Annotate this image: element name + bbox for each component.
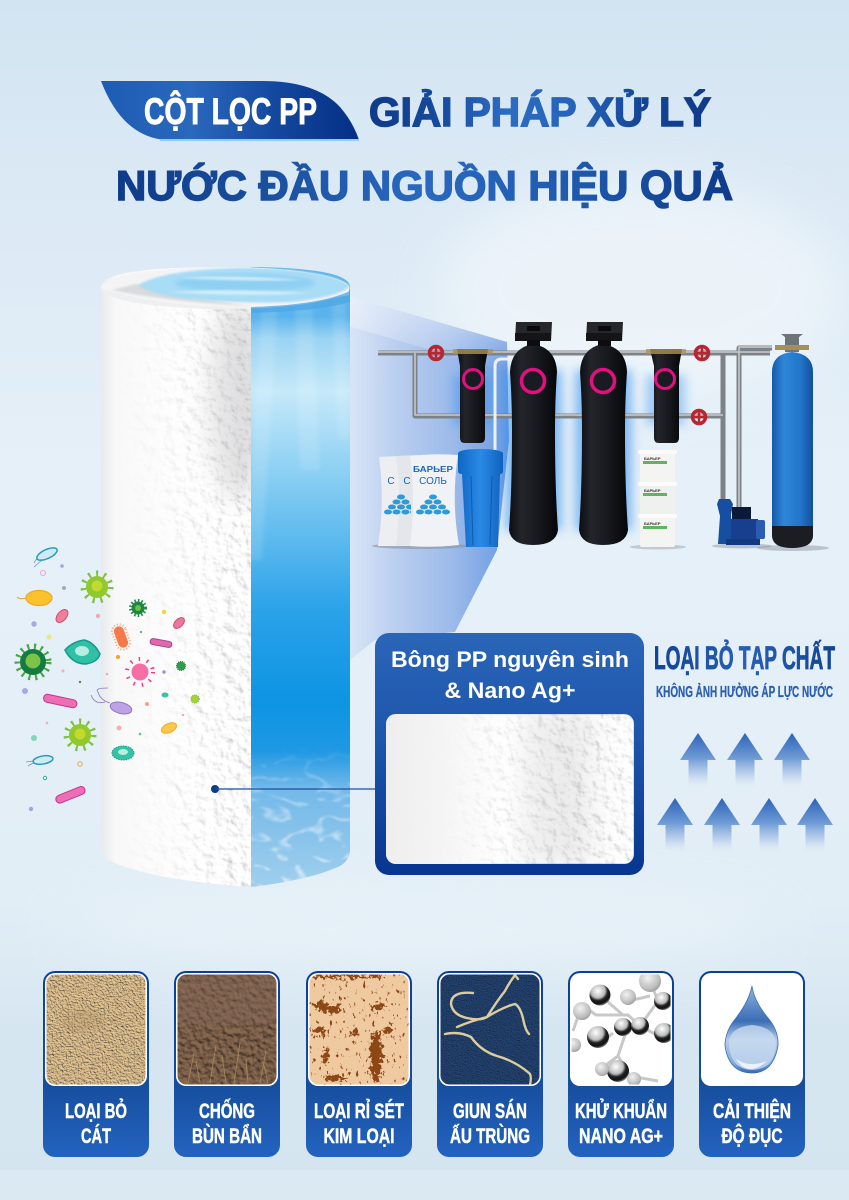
microbe: pink virus xyxy=(127,659,153,685)
small filter 1 xyxy=(453,349,493,443)
label: NANO AG+ xyxy=(579,1125,663,1148)
label: KIM LOẠI xyxy=(324,1125,394,1148)
microbes xyxy=(17,545,199,811)
label xyxy=(65,1099,127,1148)
small floating dots xyxy=(22,564,184,811)
valves xyxy=(429,346,709,424)
upward water-pressure arrows xyxy=(657,733,833,854)
title banner: cột lọc PP: CỘT LỌC PP xyxy=(144,90,317,132)
blue filter tank xyxy=(757,334,829,551)
card: sand xyxy=(43,971,149,1157)
microbe: blue protozoa lower xyxy=(26,754,54,766)
label: KHỬ KHUẨN xyxy=(575,1099,667,1123)
water surface xyxy=(138,268,350,303)
microbe: magenta small rod xyxy=(150,638,172,648)
heading: remove impurities xyxy=(654,640,835,701)
microbe: green virus xyxy=(84,574,110,600)
label: CHỐNG xyxy=(199,1099,255,1123)
foam close-up swatch xyxy=(386,714,634,864)
salt bags xyxy=(372,454,468,549)
microbe: purple flagellate xyxy=(91,688,133,716)
chemical buckets xyxy=(630,450,686,550)
microbe: dark green small xyxy=(130,600,146,616)
salt bags: С xyxy=(403,476,411,487)
panel heading xyxy=(391,647,629,703)
card: mud xyxy=(174,971,280,1157)
label xyxy=(713,1099,791,1148)
label xyxy=(192,1099,262,1148)
microbe: dark green tiny xyxy=(176,662,186,670)
card: worms xyxy=(437,971,543,1157)
microbe: teal amoeba lower xyxy=(112,746,134,760)
panel: PP cotton and Nano Ag+ xyxy=(375,633,644,875)
microbe: green virus lower xyxy=(67,722,93,748)
salt bags: СОЛЬ xyxy=(419,476,447,487)
feature cards xyxy=(43,970,805,1157)
label xyxy=(314,1100,404,1148)
PP filter cylinder xyxy=(100,267,376,890)
panel heading: Bông PP nguyên sinh xyxy=(391,647,629,672)
chemical buckets: БАРЬЕР xyxy=(644,456,661,461)
black tank 1 xyxy=(509,322,558,545)
label: BÙN BẨN xyxy=(192,1124,262,1148)
image: mud texture xyxy=(177,974,277,1085)
image: rust texture xyxy=(306,974,409,1085)
image: silver molecules xyxy=(572,974,670,1084)
blue salt tank xyxy=(458,449,503,547)
pump xyxy=(712,499,772,548)
chemical buckets: БАРЬЕР xyxy=(644,521,661,526)
title banner: cột lọc PP xyxy=(101,81,359,141)
card: nano silver xyxy=(567,970,674,1157)
microbe: dark green spiked xyxy=(18,647,48,677)
pipes xyxy=(378,347,772,510)
tank glow xyxy=(453,370,685,530)
microbe: magenta rod xyxy=(43,694,78,708)
white foam half xyxy=(101,267,266,887)
small filter 2 xyxy=(646,349,686,443)
microbe: teal tiny xyxy=(162,692,168,698)
microbe: orange tiny xyxy=(160,721,178,735)
image: sand texture xyxy=(46,974,146,1085)
microbe: lime tiny xyxy=(191,695,199,703)
black tank 2 xyxy=(579,322,628,545)
title line 2: NƯỚC ĐẦU NGUỒN HIỆU QUẢ xyxy=(116,161,733,209)
label: CẢI THIỆN xyxy=(713,1099,791,1123)
salt bags: С xyxy=(387,476,395,487)
microbe: pink small bean xyxy=(172,616,186,630)
label: ẤU TRÙNG xyxy=(450,1124,530,1148)
microbe: yellow bacterium xyxy=(17,590,52,606)
microbe: pink bean xyxy=(54,607,70,625)
panel heading: & Nano Ag+ xyxy=(444,678,576,703)
image: worms on dark cloth xyxy=(440,974,540,1093)
label: CÁT xyxy=(81,1125,111,1148)
water half xyxy=(246,267,351,890)
card: water clarity xyxy=(699,971,805,1157)
label: LOẠI RỈ SÉT xyxy=(314,1100,404,1123)
microbe: magenta rod lower xyxy=(55,785,86,804)
title xyxy=(101,81,733,209)
label xyxy=(575,1099,667,1148)
image: water drop xyxy=(725,986,778,1073)
microbe: orange rod xyxy=(110,622,132,652)
top cap of cylinder xyxy=(100,267,350,313)
microbe: teal amoeba xyxy=(65,640,100,664)
leader dot and line xyxy=(211,785,376,793)
label: GIUN SÁN xyxy=(453,1100,527,1123)
label: LOẠI BỎ xyxy=(65,1099,127,1123)
label: ĐỘ ĐỤC xyxy=(722,1124,782,1148)
chemical buckets: БАРЬЕР xyxy=(644,488,661,493)
card: rust xyxy=(306,971,412,1157)
filtration equipment xyxy=(372,322,829,551)
label xyxy=(450,1100,530,1148)
title line 1: GIẢI PHÁP XỬ LÝ xyxy=(369,89,711,135)
salt bags: БАРЬЕР xyxy=(413,465,454,474)
projection beam from cylinder to equipment xyxy=(348,296,509,660)
microbe: blue protozoa top xyxy=(34,545,59,567)
